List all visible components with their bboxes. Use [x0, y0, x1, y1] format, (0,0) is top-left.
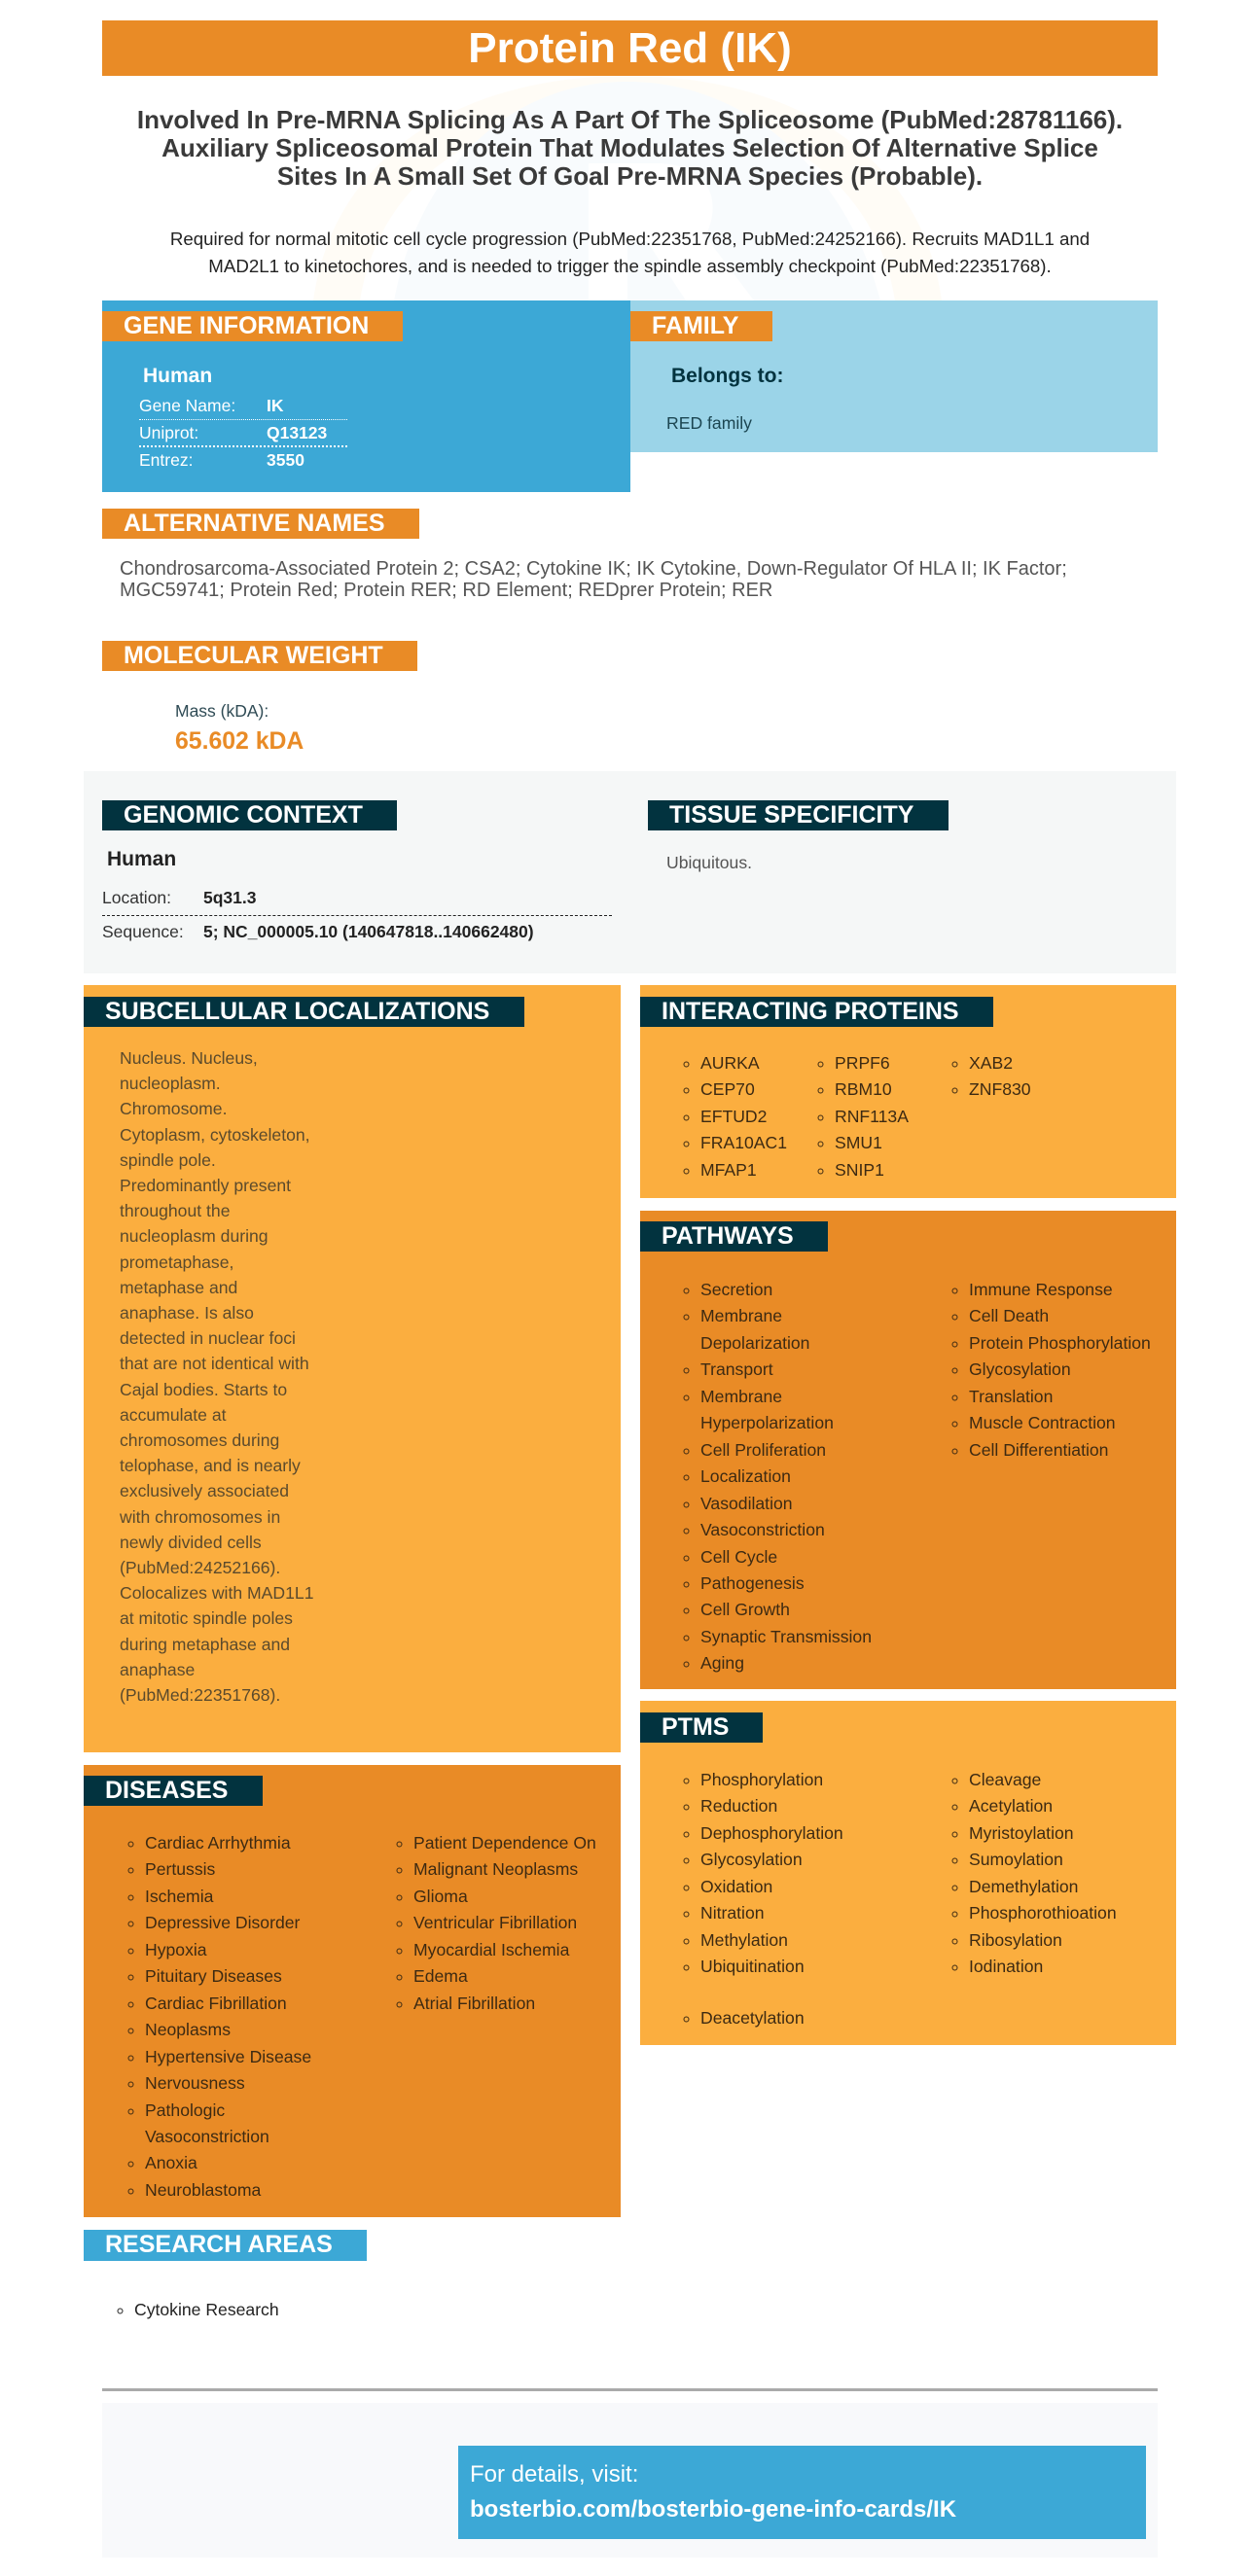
title: Protein Red (IK)	[468, 24, 792, 72]
panel: gene information	[102, 300, 630, 492]
location row: Location:	[102, 888, 171, 907]
heading: genomic context: GENOMIC CONTEXT	[124, 801, 363, 829]
pathway list column 2	[951, 1280, 1151, 1460]
heading: ptms	[640, 1712, 763, 1743]
ptm list column 1: Ubiquitination	[700, 1957, 805, 1976]
localization text: with chromosomes in	[120, 1507, 280, 1527]
pathway list column 2: Protein Phosphorylation	[969, 1333, 1151, 1353]
mass block	[175, 701, 304, 755]
disease list column 2: Ventricular Fibrillation	[413, 1913, 577, 1932]
gene table: Uniprot:	[139, 423, 198, 442]
protein list column 1: AURKA	[700, 1053, 760, 1073]
ptm list column 2: Demethylation	[969, 1877, 1078, 1896]
gene table	[139, 396, 347, 470]
protein list column 2	[817, 1053, 909, 1180]
belongs to label: Belongs to:	[671, 365, 784, 387]
pathway list column 1: Membrane	[700, 1387, 782, 1406]
disease list column 1: Anoxia	[145, 2153, 197, 2172]
subtitle: Auxiliary Spliceosomal Protein That Modulates Selection Of Alternative Splice	[161, 133, 1098, 162]
disease list column 1: Cardiac Arrhythmia	[145, 1833, 291, 1853]
ptm list column 2: Myristoylation	[969, 1823, 1074, 1843]
disease list column 2: Patient Dependence On	[413, 1833, 596, 1853]
localization text: nucleoplasm.	[120, 1074, 221, 1093]
ptm list column 2: Iodination	[969, 1957, 1043, 1976]
ptm list column 2: Cleavage	[969, 1770, 1041, 1789]
localization text: exclusively associated	[120, 1481, 289, 1500]
pathway list column 1: Vasodilation	[700, 1494, 793, 1513]
heading: family: FAMILY	[652, 312, 738, 339]
panel: pathways	[640, 1211, 1176, 1689]
ptm list column 1: Nitration	[700, 1903, 765, 1923]
mass label: Mass (kDA):	[175, 701, 268, 721]
panel: footer	[102, 2403, 1158, 2558]
heading: pathways: PATHWAYS	[662, 1222, 794, 1250]
localization text: Colocalizes with MAD1L1	[120, 1583, 313, 1603]
ptm list column 1: Methylation	[700, 1930, 788, 1950]
heading: pathways	[640, 1221, 828, 1252]
protein list column 3: ZNF830	[969, 1079, 1031, 1099]
panel: diseases	[84, 1765, 621, 2217]
ptm list column 1: Glycosylation	[700, 1850, 803, 1869]
pathway list column 1: Cell Proliferation	[700, 1440, 826, 1460]
heading: interacting proteins: INTERACTING PROTEINS	[662, 998, 959, 1025]
ptm list column 2: Ribosylation	[969, 1930, 1062, 1950]
description: Required for normal mitotic cell cycle progression (PubMed:22351768, PubMed:24252166). Recruits MAD1L1 and	[170, 229, 1090, 249]
protein list column 2: SMU1	[835, 1133, 882, 1152]
protein list column 1: FRA10AC1	[700, 1133, 787, 1152]
alternative names text: MGC59741; Protein Red; Protein RER; RD Element; REDprer Protein; RER	[120, 580, 772, 601]
ptm list column 1	[683, 1770, 843, 1976]
disease list column 1: Vasoconstriction	[145, 2127, 269, 2146]
callout url: bosterbio.com/bosterbio-gene-info-cards/IK	[470, 2496, 956, 2523]
protein list column 1: EFTUD2	[700, 1107, 767, 1126]
pathway list column 1: Aging	[700, 1653, 744, 1673]
localization text: newly divided cells	[120, 1533, 262, 1552]
disease list column 1: Pituitary Diseases	[145, 1966, 282, 1986]
disease list column 1: Cardiac Fibrillation	[145, 1994, 287, 2013]
tissue text: Ubiquitous.	[666, 853, 752, 872]
alternative names text: Chondrosarcoma-Associated Protein 2; CSA2; Cytokine IK; IK Cytokine, Down-Regulator Of HLA II; IK Factor;	[120, 558, 1067, 580]
disease list column 2: Malignant Neoplasms	[413, 1859, 578, 1879]
ptm list trailing item: Deacetylation	[700, 2008, 805, 2028]
ptm list column 1: Reduction	[700, 1796, 777, 1816]
pathway list column 1: Synaptic Transmission	[700, 1627, 872, 1646]
localization text: at mitotic spindle poles	[120, 1608, 293, 1628]
disease list column 2: Glioma	[413, 1887, 468, 1906]
title	[102, 20, 1158, 76]
description: MAD2L1 to kinetochores, and is needed to trigger the spindle assembly checkpoint (PubMed:22351768).	[208, 256, 1052, 276]
heading: diseases	[84, 1776, 263, 1806]
heading: ptms: PTMS	[662, 1713, 729, 1741]
pathway list column 1: Localization	[700, 1466, 791, 1486]
heading: diseases: DISEASES	[105, 1777, 228, 1804]
alternative names text	[120, 558, 1067, 601]
pathway list column 2: Translation	[969, 1387, 1053, 1406]
disease list column 1: Hypertensive Disease	[145, 2047, 311, 2066]
heading: alternative names: ALTERNATIVE NAMES	[124, 510, 385, 537]
mass value: 65.602 kDA	[175, 728, 304, 755]
ptm list column 2: Acetylation	[969, 1796, 1053, 1816]
localization text: anaphase. Is also	[120, 1303, 254, 1323]
disease list column 1: Pertussis	[145, 1859, 215, 1879]
localization text: telophase, and is nearly	[120, 1456, 301, 1475]
localization text: anaphase	[120, 1660, 195, 1679]
disease list column 1: Neoplasms	[145, 2020, 231, 2039]
protein list column 2: RNF113A	[835, 1107, 909, 1126]
localization text: spindle pole.	[120, 1150, 216, 1170]
heading: gene information: GENE INFORMATION	[124, 312, 369, 339]
heading: research areas: RESEARCH AREAS	[105, 2231, 333, 2258]
gene table: IK	[267, 396, 284, 415]
protein list column 2: SNIP1	[835, 1160, 884, 1180]
pathway list column 1: Membrane	[700, 1306, 782, 1325]
pathway list column 1: Pathogenesis	[700, 1573, 805, 1593]
disease list column 1: Ischemia	[145, 1887, 213, 1906]
localization text: Cytoplasm, cytoskeleton,	[120, 1125, 310, 1145]
ptm list column 1: Phosphorylation	[700, 1770, 823, 1789]
pathway list column 2: Muscle Contraction	[969, 1413, 1116, 1432]
localization text: metaphase and	[120, 1278, 237, 1297]
subtitle	[137, 105, 1123, 191]
heading: molecular weight: MOLECULAR WEIGHT	[124, 642, 383, 669]
localization text: (PubMed:22351768).	[120, 1685, 280, 1705]
localization text: (PubMed:24252166).	[120, 1558, 280, 1577]
pathway list column 1: Transport	[700, 1359, 773, 1379]
ptm list column 1: Dephosphorylation	[700, 1823, 843, 1843]
description	[170, 229, 1090, 276]
pathway list column 2: Cell Death	[969, 1306, 1049, 1325]
gene table: 3550	[267, 450, 304, 470]
localization text: detected in nuclear foci	[120, 1328, 296, 1348]
disease list column 2: Edema	[413, 1966, 468, 1986]
localization text: Cajal bodies. Starts to	[120, 1380, 287, 1399]
pathway list column 1: Cell Cycle	[700, 1547, 777, 1567]
protein list column 3	[951, 1053, 1031, 1099]
pathway list column 2: Cell Differentiation	[969, 1440, 1108, 1460]
subtitle: Involved In Pre-MRNA Splicing As A Part Of The Spliceosome (PubMed:28781166).	[137, 105, 1123, 134]
callout: details link	[458, 2446, 1146, 2539]
gene table: Entrez:	[139, 450, 193, 470]
disease list column 2: Myocardial Ischemia	[413, 1940, 569, 1959]
pathway list column 1: Vasoconstriction	[700, 1520, 825, 1539]
ptm list column 2: Phosphorothioation	[969, 1903, 1117, 1923]
ptm list column 2	[951, 1770, 1117, 1976]
disease list column 2	[397, 1833, 596, 2013]
heading: family	[630, 311, 772, 341]
species label: Human	[107, 848, 176, 870]
heading: subcellular localizations: SUBCELLULAR LOCALIZATIONS	[105, 998, 489, 1025]
sequence value: 5; NC_000005.10 (140647818..140662480)	[203, 922, 534, 941]
panel: interacting proteins	[640, 985, 1176, 1198]
disease list column 1: Pathologic	[145, 2100, 225, 2120]
localization text: nucleoplasm during	[120, 1226, 268, 1246]
pathway list column 1	[683, 1280, 872, 1673]
disease list column 2: Atrial Fibrillation	[413, 1994, 535, 2013]
localization text: that are not identical with	[120, 1354, 309, 1373]
localization text: during metaphase and	[120, 1635, 290, 1654]
localization text: accumulate at	[120, 1405, 227, 1425]
panel: family	[630, 300, 1158, 452]
localization text: prometaphase,	[120, 1253, 233, 1272]
localization text: Chromosome.	[120, 1099, 228, 1118]
disease list column 1: Hypoxia	[145, 1940, 207, 1959]
ptm list column 2: Sumoylation	[969, 1850, 1063, 1869]
research areas list: Cytokine Research	[134, 2300, 279, 2319]
protein list column 1: MFAP1	[700, 1160, 757, 1180]
protein list column 2: PRPF6	[835, 1053, 890, 1073]
disease list column 1: Nervousness	[145, 2073, 245, 2093]
disease list column 1	[128, 1833, 311, 2200]
localization text: Predominantly present	[120, 1176, 291, 1195]
disease list column 1: Depressive Disorder	[145, 1913, 300, 1932]
family value: RED family	[666, 413, 752, 433]
location value: 5q31.3	[203, 888, 256, 907]
watermark logo	[313, 76, 942, 300]
localization text: chromosomes during	[120, 1430, 279, 1450]
protein list column 1	[683, 1053, 787, 1180]
sequence row: Sequence:	[102, 922, 184, 941]
pathway list column 1: Cell Growth	[700, 1600, 790, 1619]
gene table: Q13123	[267, 423, 327, 442]
pathway list column 2: Glycosylation	[969, 1359, 1071, 1379]
heading: tissue specificity: TISSUE SPECIFICITY	[669, 801, 913, 829]
protein list column 3: XAB2	[969, 1053, 1013, 1073]
pathway list column 1: Secretion	[700, 1280, 772, 1299]
localization text: throughout the	[120, 1201, 230, 1220]
panel: ptms	[640, 1701, 1176, 2045]
panel: subcellular localizations	[84, 985, 621, 1752]
panel: genomic context and tissue specificity	[84, 771, 1176, 973]
protein list column 2: RBM10	[835, 1079, 892, 1099]
pathway list column 2: Immune Response	[969, 1280, 1113, 1299]
ptm list column 1: Oxidation	[700, 1877, 772, 1896]
gene table: Gene Name:	[139, 396, 235, 415]
pathway list column 1: Depolarization	[700, 1333, 809, 1353]
subtitle: Sites In A Small Set Of Goal Pre-MRNA Species (Probable).	[277, 161, 983, 191]
callout label: For details, visit:	[470, 2461, 638, 2488]
localization text: Nucleus. Nucleus,	[120, 1048, 258, 1068]
disease list column 1: Neuroblastoma	[145, 2180, 261, 2200]
protein list column 1: CEP70	[700, 1079, 755, 1099]
species label: Human	[143, 365, 212, 387]
localization text	[120, 1048, 313, 1705]
pathway list column 1: Hyperpolarization	[700, 1413, 834, 1432]
